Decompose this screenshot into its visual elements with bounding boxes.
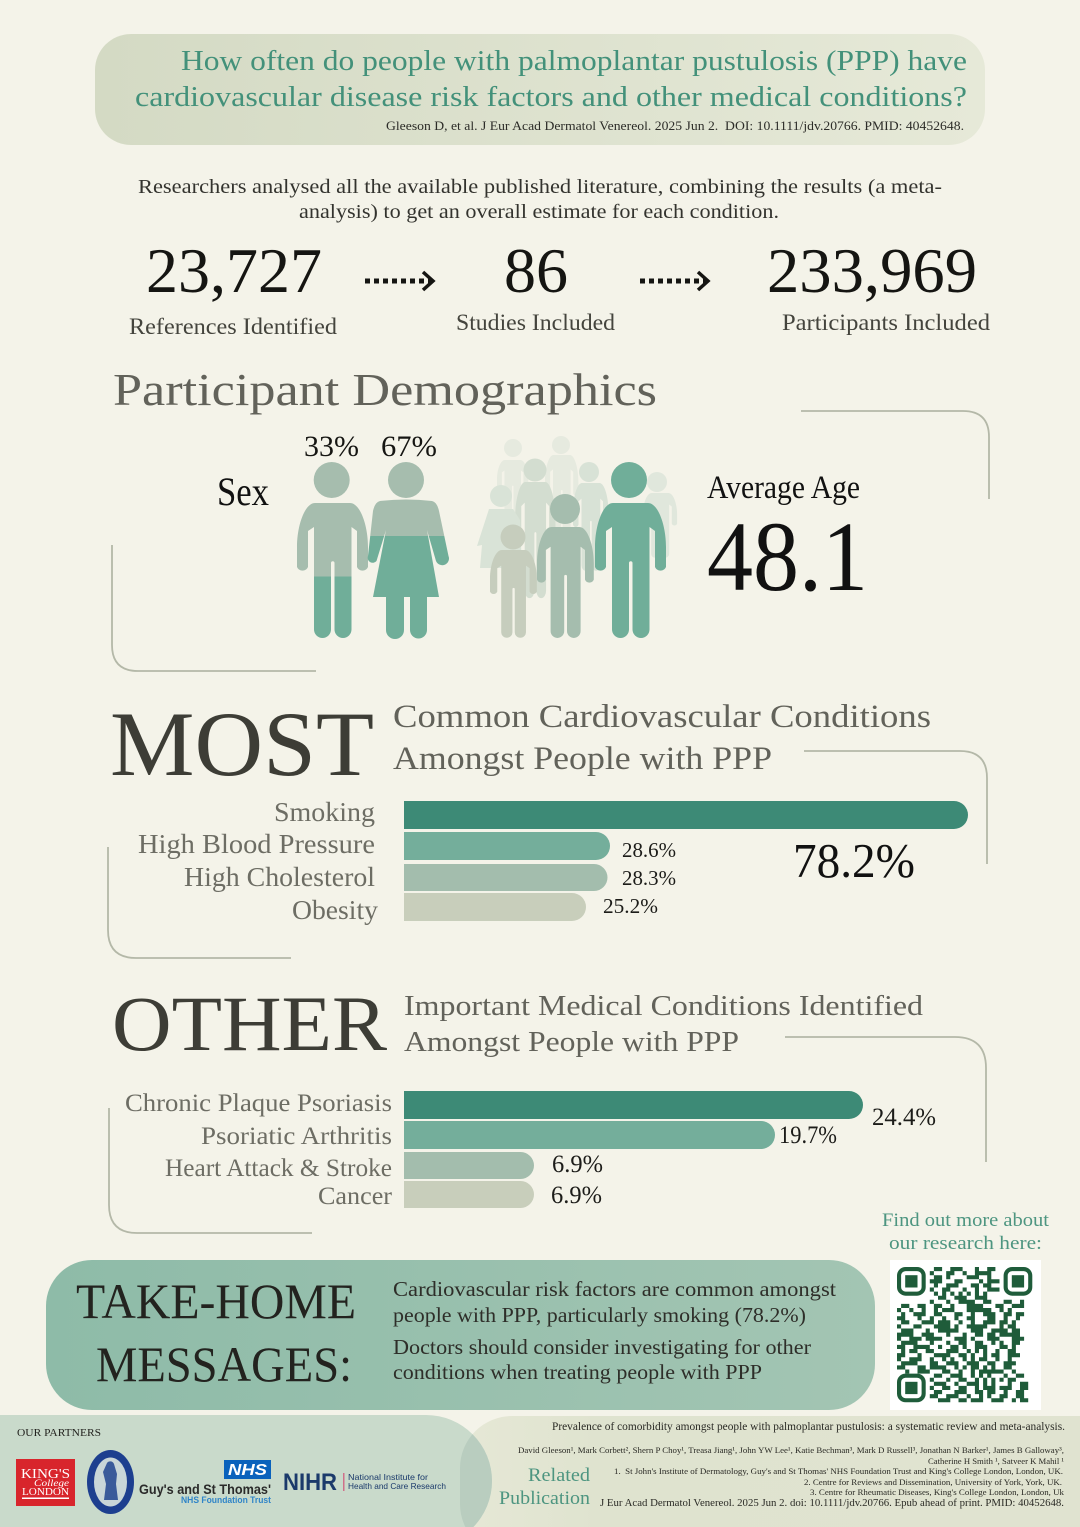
take-home text: Doctors should consider investigating for other	[393, 1335, 811, 1359]
publication details: 2. Centre for Reviews and Dissemination, University of York, York, UK.	[804, 1477, 1062, 1487]
bar chart: cardiovascular conditions: 28.3%	[622, 866, 676, 890]
bar chart: other medical conditions: Cancer	[318, 1183, 393, 1210]
heading: participant demographics: Participant Demographics	[113, 364, 657, 415]
bar chart: other medical conditions: Chronic Plaque Psoriasis	[125, 1090, 392, 1117]
publication details: 1. St John's Institute of Dermatology, Guy's and St Thomas' NHS Foundation Trust and King's College London, London, UK.	[614, 1466, 1063, 1476]
sex percentages: 67%	[381, 430, 437, 463]
related publication label: Publication	[499, 1488, 591, 1509]
qr caption	[882, 1210, 1050, 1254]
intro text: analysis) to get an overall estimate for each condition.	[299, 201, 779, 223]
take-home text: people with PPP, particularly smoking (78.2%)	[393, 1303, 806, 1327]
logo: nihr: National Institute for	[348, 1472, 428, 1482]
related publication label: Related	[528, 1465, 591, 1486]
publication details: J Eur Acad Dermatol Venereol. 2025 Jun 2. doi: 10.1111/jdv.20766. Epub ahead of print. PMID: 40452648.	[600, 1497, 1064, 1509]
heading: other conditions: Important Medical Conditions Identified	[404, 990, 924, 1022]
take-home heading	[76, 1273, 356, 1392]
bar chart: other medical conditions: 6.9%	[552, 1151, 603, 1178]
average age: Average Age	[707, 470, 860, 506]
panel: take-home messages	[46, 1260, 875, 1410]
bar chart: cardiovascular conditions: 78.2%	[793, 833, 915, 888]
logo: nihr: NIHR	[283, 1469, 337, 1496]
logo: nihr	[283, 1469, 446, 1496]
take-home text: conditions when treating people with PPP	[393, 1360, 762, 1384]
label: sex: Sex	[217, 469, 269, 514]
stat: references identified: References Identified	[129, 314, 338, 339]
partners label: OUR PARTNERS	[17, 1427, 101, 1439]
related publication label	[499, 1465, 591, 1509]
qr caption: Find out more about	[882, 1210, 1050, 1231]
qr caption: our research here:	[889, 1233, 1042, 1254]
logo: guys and st thomas nhs: NHS	[228, 1462, 267, 1479]
bar chart: cardiovascular conditions: High Cholesterol	[184, 862, 375, 892]
take-home heading: TAKE-HOME	[76, 1273, 356, 1329]
title: How often do people with palmoplantar pustulosis (PPP) have	[181, 45, 967, 77]
bar chart: cardiovascular conditions: 25.2%	[603, 894, 658, 918]
heading: other conditions: OTHER	[112, 980, 387, 1067]
qr code	[890, 1260, 1041, 1410]
logo: guys and st thomas nhs	[139, 1460, 271, 1505]
intro text	[138, 176, 942, 223]
bar chart: cardiovascular conditions: Obesity	[292, 895, 379, 925]
bar chart: cardiovascular conditions	[138, 797, 968, 925]
logo: kings college london: KING'S	[21, 1467, 70, 1482]
stat: studies included: 86	[504, 235, 568, 306]
publication details: Catherine H Smith ¹, Satveer K Mahil ¹	[928, 1456, 1064, 1466]
publication details: David Gleeson¹, Mark Corbett², Shern P Choy¹, Treasa Jiang¹, John YW Lee¹, Katie Bechman³, Mark D Russell³, Jonathan N Barker¹, James B Galloway³,	[518, 1445, 1064, 1455]
logo: kings college london: College	[34, 1478, 69, 1488]
panel: related publication	[460, 1416, 1080, 1527]
stat: participants included	[767, 235, 991, 335]
intro text: Researchers analysed all the available published literature, combining the results (a meta-	[138, 176, 942, 198]
bar chart: cardiovascular conditions: 28.6%	[622, 838, 676, 862]
logo: guys and st thomas nhs: Guy's and St Thomas'	[139, 1482, 271, 1497]
stat: participants included: Participants Included	[782, 310, 991, 335]
stat: references identified	[129, 235, 338, 339]
publication details: 3. Centre for Rheumatic Diseases, King's College London, London, Uk	[810, 1487, 1065, 1497]
take-home text: Cardiovascular risk factors are common amongst	[393, 1277, 836, 1301]
logo: nihr: Health and Care Research	[348, 1481, 446, 1491]
take-home heading: MESSAGES:	[96, 1336, 352, 1392]
title: cardiovascular disease risk factors and other medical conditions?	[135, 81, 967, 113]
icon: woman 67 percent	[368, 462, 449, 639]
sex percentages: 33%	[304, 430, 359, 463]
heading: most common: Common Cardiovascular Conditions	[393, 699, 931, 735]
bar chart: other medical conditions: 19.7%	[779, 1122, 837, 1149]
logo: dermatology society seal	[87, 1450, 134, 1514]
logo: guys and st thomas nhs: NHS Foundation Trust	[181, 1495, 271, 1505]
arrow: studies to participants	[640, 272, 708, 290]
take-home text	[393, 1277, 836, 1384]
bar chart: other medical conditions: Psoriatic Arthritis	[201, 1123, 392, 1150]
heading: other conditions: Amongst People with PPP	[404, 1026, 739, 1058]
bar chart: other medical conditions: Heart Attack & Stroke	[165, 1155, 392, 1182]
publication details	[518, 1419, 1065, 1509]
stat: references identified: 23,727	[146, 235, 322, 306]
arrow: references to studies	[365, 272, 433, 290]
heading: most common	[110, 693, 931, 795]
logo: kings college london	[16, 1459, 75, 1506]
panel: our partners	[0, 1415, 492, 1527]
stat: studies included: Studies Included	[456, 310, 616, 335]
heading: other conditions	[112, 980, 924, 1067]
stat: studies included	[456, 235, 616, 335]
bar chart: cardiovascular conditions: Smoking	[274, 797, 375, 827]
icon: man 33 percent	[297, 462, 368, 638]
heading: most common: Amongst People with PPP	[393, 741, 772, 777]
publication details: Prevalence of comorbidity amongst people with palmoplantar pustulosis: a systematic review and meta-analysis.	[552, 1419, 1065, 1433]
bar chart: cardiovascular conditions: High Blood Pressure	[138, 829, 375, 859]
icon: crowd of people	[477, 436, 677, 638]
bar chart: other medical conditions: 6.9%	[551, 1182, 602, 1209]
citation: Gleeson D, et al. J Eur Acad Dermatol Venereol. 2025 Jun 2. DOI: 10.1111/jdv.20766. PMID: 40452648.	[386, 119, 964, 133]
heading: most common: MOST	[110, 693, 374, 795]
stat: participants included: 233,969	[767, 235, 977, 306]
title panel	[95, 34, 985, 145]
title	[135, 45, 967, 113]
logo: kings college london: LONDON	[22, 1487, 69, 1498]
bar chart: other medical conditions	[125, 1090, 936, 1210]
bar chart: other medical conditions: 24.4%	[872, 1104, 936, 1131]
average age: 48.1	[707, 501, 868, 612]
sex percentages	[304, 430, 437, 463]
